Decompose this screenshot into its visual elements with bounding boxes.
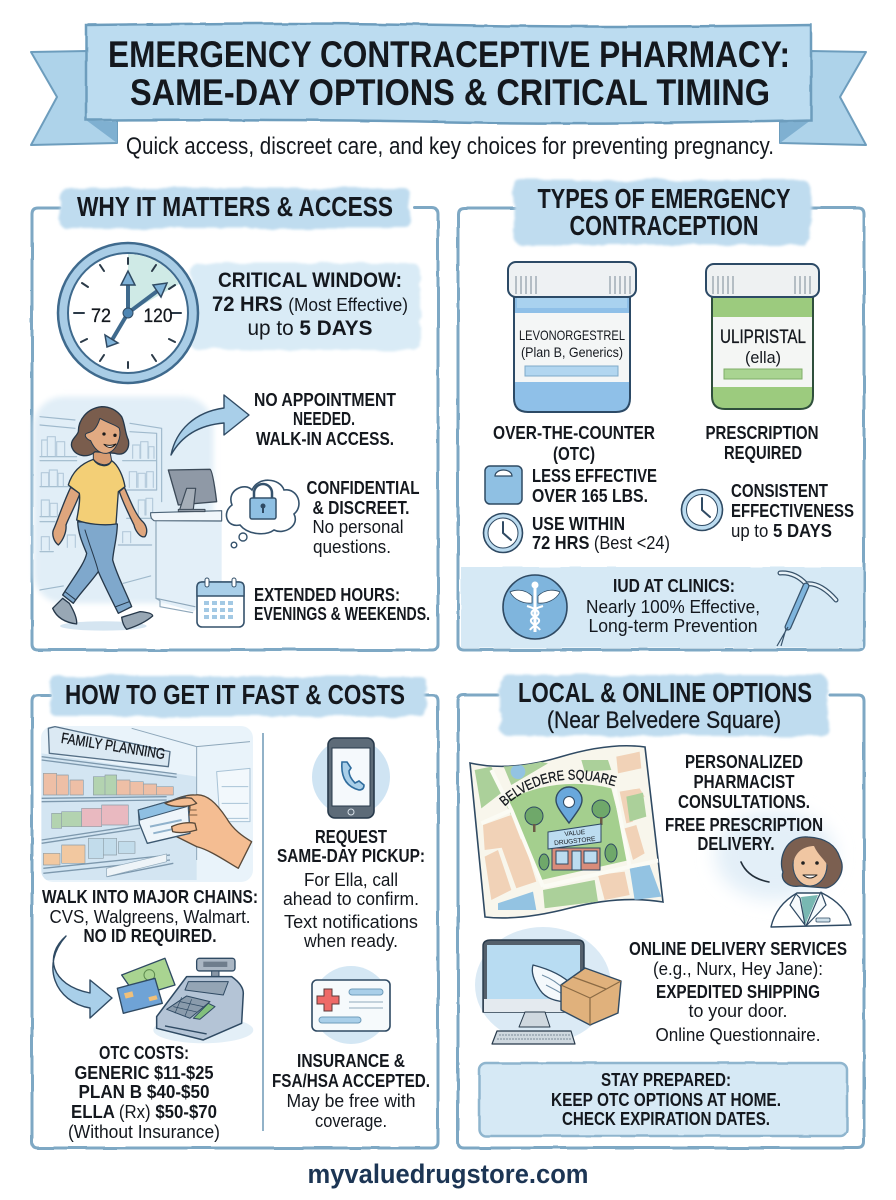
chains text: CVS, Walgreens, Walmart. — [50, 906, 250, 927]
pharmacist text: DELIVERY. — [698, 834, 774, 854]
arms — [53, 487, 80, 545]
pharmacist text: FREE PRESCRIPTION — [665, 815, 823, 835]
map: belvedere square — [469, 745, 664, 919]
iud text: Long-term Prevention — [588, 615, 758, 636]
pickup text: For Ella, call — [304, 869, 398, 890]
illustration: woman walking in pharmacy — [33, 397, 222, 631]
pharmacist text: PHARMACIST — [694, 772, 795, 792]
ribbon tail: left — [31, 51, 117, 145]
chains text: WALK INTO MAJOR CHAINS: — [42, 887, 258, 907]
icon: small clock 72 hours — [484, 514, 522, 552]
online delivery text: ONLINE DELIVERY SERVICES — [629, 939, 847, 959]
critical window text: up to 5 DAYS — [248, 317, 372, 340]
heading: WHY IT MATTERS & ACCESS — [77, 191, 393, 222]
icon: caduceus — [503, 575, 567, 639]
critical window text — [212, 269, 408, 340]
icon: bathroom scale — [485, 466, 522, 504]
otc label: OVER-THE-COUNTER — [493, 423, 655, 443]
scene wash — [33, 397, 213, 603]
insurance text — [272, 1051, 430, 1131]
heading — [538, 183, 791, 241]
consistent text: EFFECTIVENESS — [731, 501, 854, 521]
pharmacy shelves — [40, 417, 162, 590]
icon: calendar — [197, 578, 244, 627]
shirt — [68, 459, 125, 525]
chains text: NO ID REQUIRED. — [84, 926, 216, 946]
walk-in text — [254, 390, 396, 449]
title text: EMERGENCY CONTRACEPTIVE PHARMACY: — [108, 34, 790, 75]
callout: stay prepared: KEEP OTC OPTIONS AT HOME. — [551, 1090, 781, 1110]
jar: ulipristal — [706, 264, 819, 409]
clock: 72 to 120 hours: 72 — [91, 306, 111, 327]
clock: 72 to 120 hours: 120 — [144, 306, 172, 327]
timing text: USE WITHIN — [532, 514, 625, 534]
online delivery text: to your door. — [688, 1000, 788, 1021]
iud band — [461, 567, 863, 648]
confidential text: & DISCREET. — [312, 498, 410, 518]
footer website: myvaluedrugstore.com — [308, 1159, 588, 1189]
icon: iud device — [777, 573, 836, 646]
weight text — [532, 466, 657, 506]
icon: small clock 5 days — [682, 490, 722, 530]
heading — [518, 677, 812, 734]
costs text: GENERIC $11-$25 — [74, 1063, 214, 1083]
subtitle: Quick access, discreet care, and key choices for preventing pregnancy. — [126, 133, 774, 160]
heading band — [514, 180, 810, 245]
callout: stay prepared: STAY PREPARED: — [601, 1070, 731, 1090]
jar: levonorgestrel: LEVONORGESTREL — [519, 327, 625, 343]
pickup text: when ready. — [303, 930, 398, 951]
costs text: ELLA (Rx) $50-$70 — [71, 1102, 217, 1122]
extended hours text: EXTENDED HOURS: — [254, 585, 400, 605]
map: belvedere square: VALUE — [564, 829, 586, 838]
illustration: computer with winged parcel — [475, 927, 621, 1044]
ribbon fold shadows — [86, 120, 811, 143]
column divider — [262, 733, 264, 1131]
weight text: OVER 165 LBS. — [532, 486, 648, 506]
pickup text: Text notifications — [284, 911, 418, 932]
insurance text: INSURANCE & — [297, 1051, 405, 1071]
jar: ulipristal: (ella) — [745, 348, 781, 367]
shoes — [53, 598, 77, 624]
title text — [108, 34, 790, 113]
pickup text: REQUEST — [315, 827, 387, 847]
insurance text: May be free with — [286, 1090, 416, 1111]
hand holding box — [138, 795, 252, 868]
pharmacist text: PERSONALIZED — [685, 752, 803, 772]
heading: TYPES OF EMERGENCY — [538, 183, 791, 214]
prescription label: PRESCRIPTION — [706, 423, 818, 443]
weight text: LESS EFFECTIVE — [532, 466, 657, 486]
callout: stay prepared: CHECK EXPIRATION DATES. — [562, 1109, 770, 1129]
consistent text: CONSISTENT — [731, 481, 828, 501]
arrow: to walk-in — [171, 395, 249, 455]
online delivery text: Online Questionnaire. — [656, 1024, 820, 1045]
map: belvedere square: BELVEDERE SQUARE — [498, 770, 617, 806]
critical window band — [190, 263, 420, 350]
insurance text: coverage. — [315, 1110, 387, 1131]
heading: LOCAL & ONLINE OPTIONS — [518, 677, 812, 708]
counter with monitor — [151, 469, 222, 613]
neck — [93, 452, 112, 465]
heading band — [500, 675, 828, 736]
critical window text: CRITICAL WINDOW: — [218, 269, 402, 292]
walk-in text: WALK-IN ACCESS. — [256, 429, 394, 449]
costs text — [68, 1043, 220, 1142]
face — [85, 418, 120, 453]
extended hours text: EVENINGS & WEEKENDS. — [254, 604, 430, 624]
consistent text — [731, 481, 854, 541]
heading: (Near Belvedere Square) — [547, 707, 781, 734]
icon: thought cloud with lock — [226, 480, 299, 548]
iud text: IUD AT CLINICS: — [613, 576, 735, 596]
walk-in text: NO APPOINTMENT — [254, 390, 396, 410]
jar: levonorgestrel: (Plan B, Generics) — [521, 344, 623, 360]
iud text: Nearly 100% Effective, — [586, 596, 760, 617]
heading: HOW TO GET IT FAST & COSTS — [65, 679, 405, 710]
panel: how to get it fast and costs — [32, 676, 438, 1148]
map pin — [556, 787, 582, 823]
confidential text — [306, 478, 420, 557]
timing text — [532, 514, 670, 553]
confidential text: questions. — [313, 536, 391, 557]
costs text: (Without Insurance) — [68, 1121, 220, 1142]
online delivery text: EXPEDITED SHIPPING — [656, 982, 820, 1002]
map: belvedere square: DRUGSTORE — [554, 836, 596, 847]
title text: SAME-DAY OPTIONS & CRITICAL TIMING — [130, 72, 770, 113]
ribbon body — [86, 24, 811, 123]
jar: ulipristal: ULIPRISTAL — [720, 327, 806, 348]
pharmacist text — [665, 752, 823, 854]
panel: why it matters and access — [32, 188, 438, 650]
pharmacist — [771, 837, 851, 927]
heading band — [60, 188, 410, 228]
panel: types of emergency contraception — [458, 180, 864, 650]
confidential text: No personal — [312, 516, 404, 537]
extended hours text — [254, 585, 430, 624]
illustration: family planning aisle — [41, 726, 253, 882]
illustration: family planning aisle: FAMILY PLANNING — [60, 730, 166, 763]
pharmacist wash — [715, 810, 835, 900]
online delivery text — [629, 939, 847, 1045]
chains text — [42, 887, 258, 946]
icon: insurance card — [312, 966, 390, 1044]
costs text: PLAN B $40-$50 — [78, 1082, 210, 1102]
insurance text: FSA/HSA ACCEPTED. — [272, 1071, 430, 1091]
pickup text — [277, 827, 425, 951]
consistent text: up to 5 DAYS — [731, 521, 832, 541]
costs text: OTC COSTS: — [99, 1043, 189, 1063]
pickup text: SAME-DAY PICKUP: — [277, 846, 425, 866]
callout: stay prepared — [479, 1063, 847, 1136]
iud text — [586, 576, 760, 636]
pickup text: ahead to confirm. — [283, 888, 419, 909]
prescription label — [706, 423, 818, 463]
prescription label: REQUIRED — [724, 443, 802, 463]
otc label — [493, 423, 655, 464]
critical window text: 72 HRS (Most Effective) — [212, 293, 408, 316]
icon: cash register — [153, 958, 253, 1043]
jeans — [63, 522, 132, 613]
timing text: 72 HRS (Best <24) — [532, 533, 670, 553]
icon: phone — [312, 738, 390, 818]
panel: local and online options — [456, 672, 866, 1150]
icon: cash and credit card — [117, 958, 175, 1013]
otc label: (OTC) — [553, 444, 595, 464]
hair — [71, 407, 129, 456]
speech line — [741, 862, 769, 882]
confidential text: CONFIDENTIAL — [306, 478, 420, 498]
arrow: to payment — [53, 936, 112, 1018]
pharmacist text: CONSULTATIONS. — [678, 792, 810, 812]
ribbon tail: right — [780, 51, 866, 145]
heading band — [50, 676, 426, 716]
online delivery text: (e.g., Nurx, Hey Jane): — [653, 958, 823, 979]
title banner — [31, 24, 866, 145]
heading: CONTRACEPTION — [570, 210, 758, 241]
walk-in text: NEEDED. — [293, 409, 355, 429]
clock: 72 to 120 hours — [58, 243, 198, 383]
jar: levonorgestrel — [508, 262, 636, 412]
